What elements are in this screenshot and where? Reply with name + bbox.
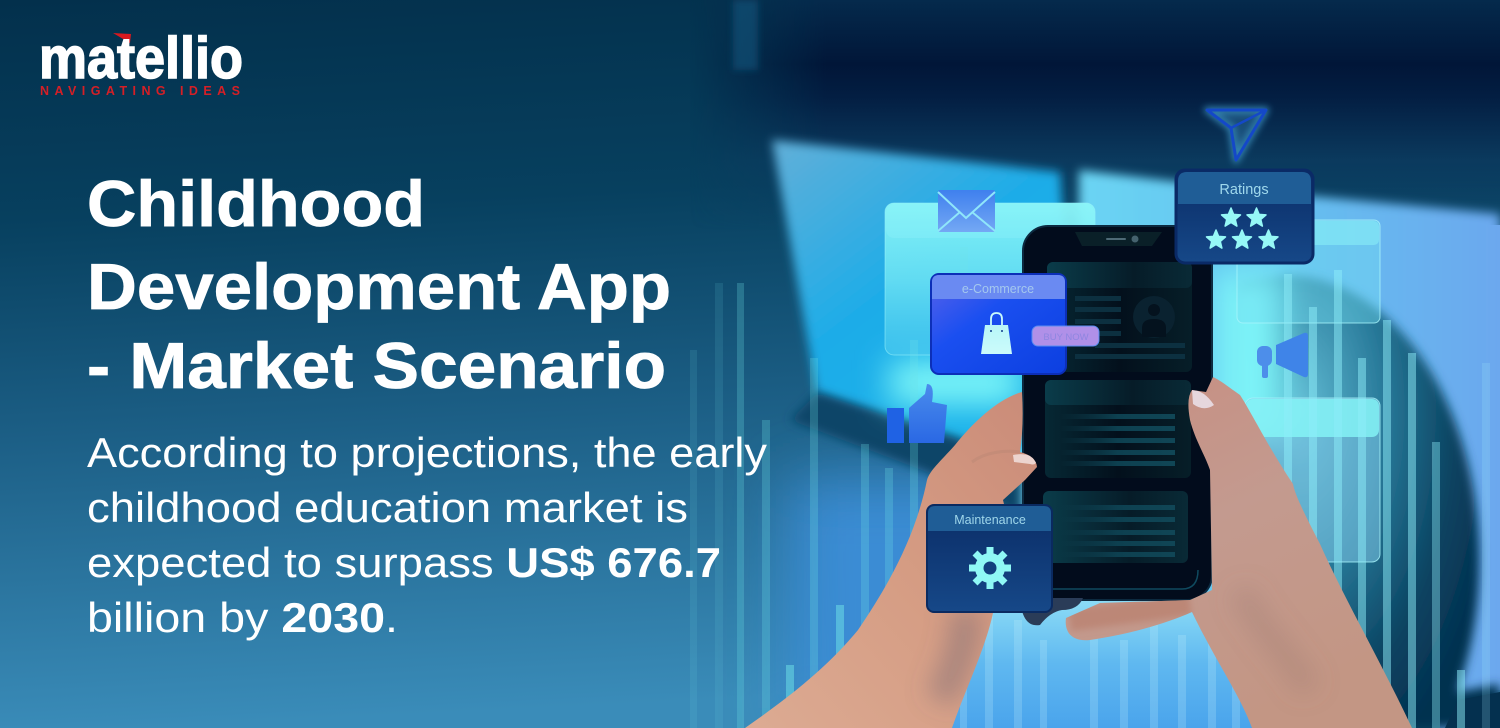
glass panel: lower right [1245,398,1380,562]
title: Childhood [87,167,425,240]
description text: billion by 2030. [87,594,398,641]
left hand [740,385,1050,728]
logo: matellio: NAVIGATING IDEAS [40,84,240,98]
phone screen card 1 [1047,262,1192,372]
description text: According to projections, the early [87,429,767,476]
card: e-Commerce: e-Commerce [962,282,1034,296]
icon: paper plane [1207,110,1266,160]
logo: matellio: matellio [39,27,243,91]
card: e-Commerce [931,274,1099,374]
card: Ratings [1176,170,1313,263]
phone [1023,226,1212,600]
icon: megaphone [1257,333,1308,378]
icon: gear [969,547,1011,589]
icon: envelope [938,190,995,232]
glass panel: upper right [1237,220,1380,323]
hidden fingers behind phone [1020,598,1083,625]
card: Maintenance: Maintenance [954,513,1026,527]
title [87,167,671,402]
card: Ratings: Ratings [1219,182,1269,198]
icon: five stars [1206,208,1278,248]
title: - Market Scenario [87,329,666,402]
decorative vertical bars chart [690,247,1490,728]
card: Maintenance [927,505,1052,612]
button: buy now: BUY NOW [1043,332,1089,343]
glass panel: upper left [885,203,1095,355]
button: buy now [1032,326,1099,346]
description text: childhood education market is [87,484,688,531]
description text [87,429,767,641]
right hand [1060,370,1420,728]
blurred photo background [690,0,1500,728]
icon: thumbs up [887,384,947,443]
description text: expected to surpass US$ 676.7 [87,539,721,586]
icon: shopping bag [981,313,1012,354]
phone screen card 2 [1045,380,1191,478]
title: Development App [87,250,671,323]
phone screen card 3 [1043,491,1188,563]
